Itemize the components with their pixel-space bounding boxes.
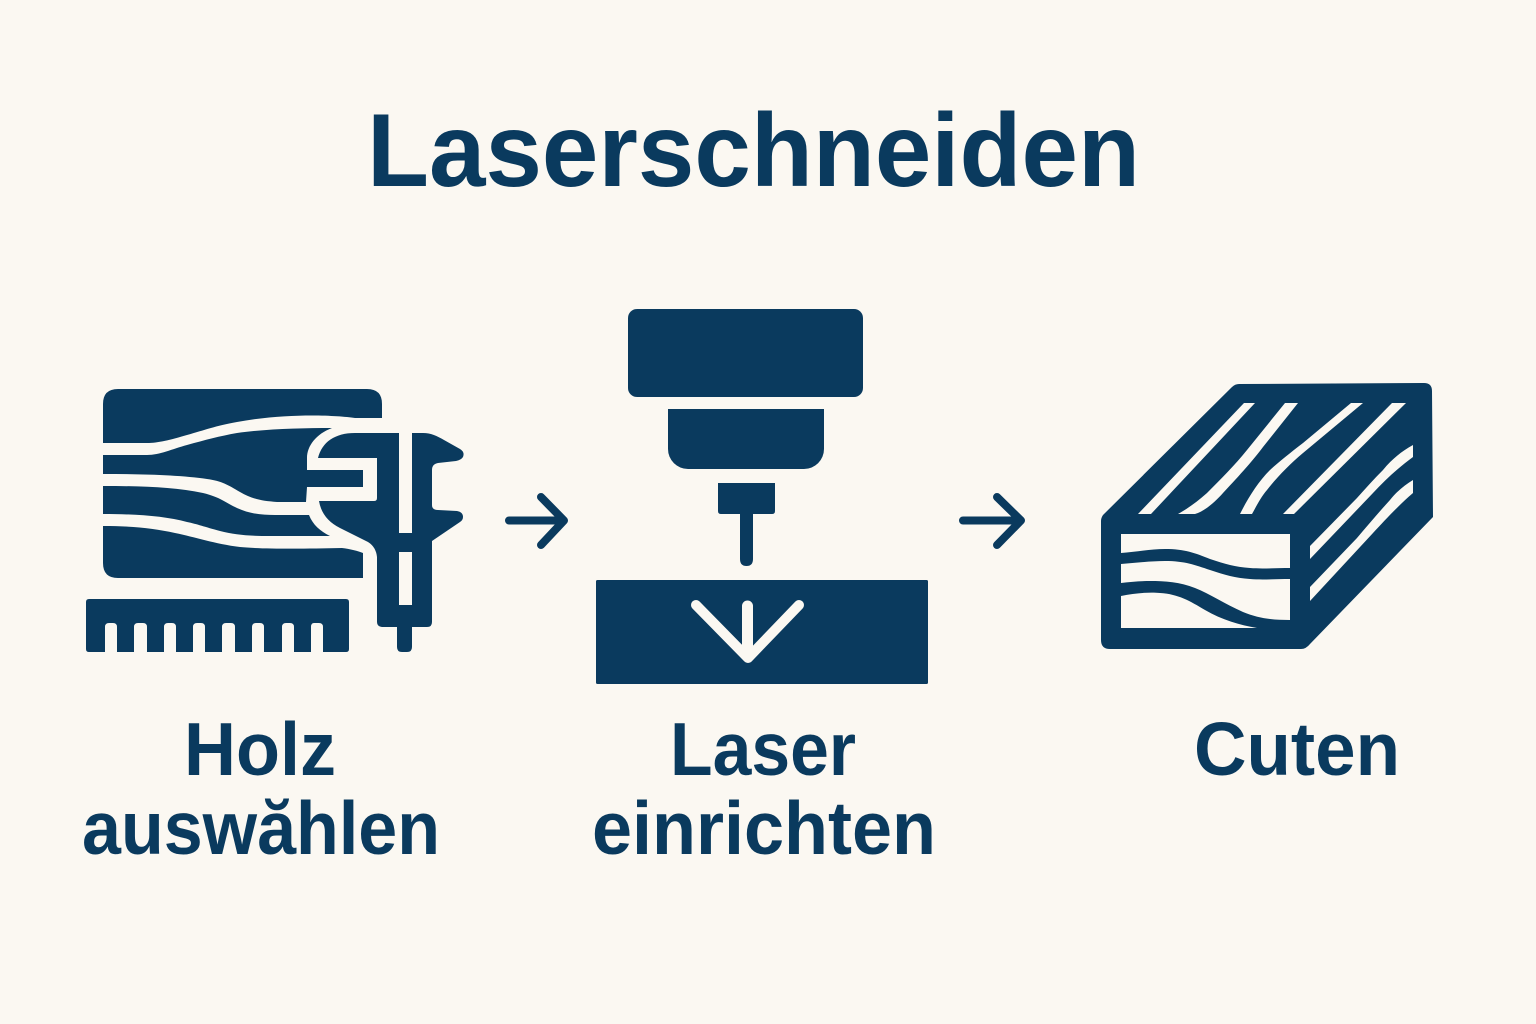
wood plank top: [103, 389, 382, 443]
label: step 1: auswăhlen: [82, 786, 440, 870]
label: step 1: [82, 707, 440, 870]
label: step 1: Holz: [184, 707, 336, 791]
top grain stripes: [1138, 403, 1406, 514]
caliper: [318, 433, 464, 652]
nozzle: [718, 483, 775, 566]
wood plank bottom: [103, 526, 363, 578]
wood plank third: [103, 486, 330, 536]
laser lens block: [668, 409, 824, 469]
label: step 2: [592, 707, 936, 870]
label: step 2: einrichten: [592, 786, 936, 870]
arrow in workpiece: [696, 605, 799, 658]
front face with grain: [1121, 534, 1290, 568]
arrow 2: [963, 497, 1021, 545]
label: step 3: Cuten: [1194, 707, 1400, 791]
block silhouette: [1101, 383, 1433, 649]
step 3 icon: cut wood block: [1101, 383, 1433, 649]
side grain stripes: [1310, 445, 1413, 601]
arrow 1: [509, 497, 564, 545]
step 2 icon: laser head over workpiece: [596, 309, 928, 684]
workpiece: [596, 580, 928, 684]
ruler: [86, 599, 349, 652]
title: Laserschneiden: [367, 93, 1140, 209]
laser housing: [628, 309, 863, 397]
label: step 2: Laser: [670, 707, 856, 791]
wood plank second: [103, 428, 363, 502]
step 1 icon: wood planks, ruler and caliper: [86, 389, 464, 652]
